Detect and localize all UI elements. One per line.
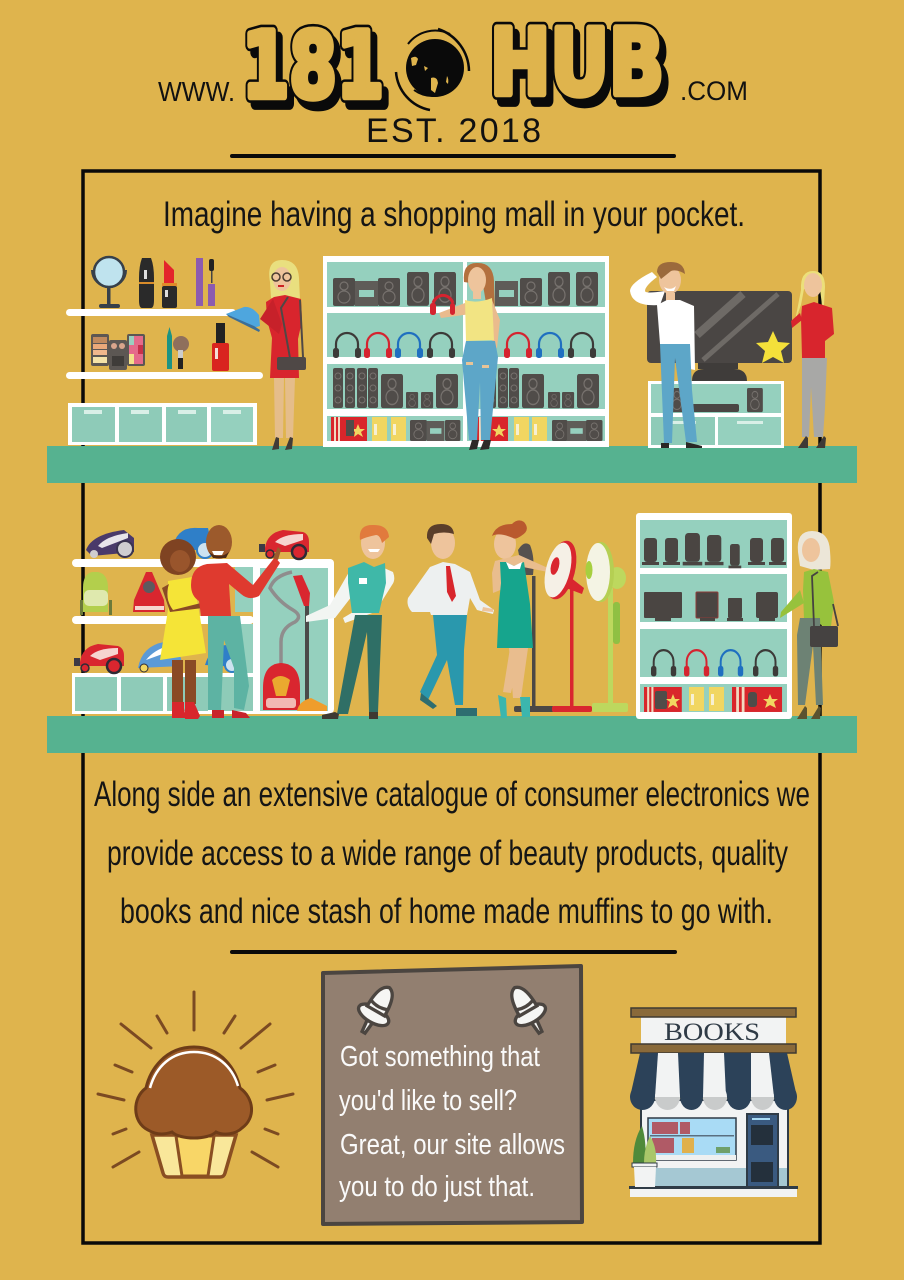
- shop base: [629, 1186, 798, 1197]
- logo: 181 wordmark: 181: [242, 14, 384, 119]
- icon: green pedestal fan: [586, 542, 628, 712]
- scene: lower store: [47, 513, 857, 753]
- beauty shelves: [66, 257, 263, 445]
- icon: left push pin: [349, 979, 404, 1041]
- icon: red pedestal fan: [540, 538, 592, 712]
- card text: you to do just that.: [339, 1171, 535, 1203]
- card text: [339, 1041, 565, 1203]
- header rule: [230, 154, 676, 158]
- headphones row: [333, 333, 596, 358]
- shelf boards: [66, 309, 263, 379]
- logo header: [158, 11, 748, 150]
- person: woman in teal dress: [492, 520, 548, 718]
- icon: vanity mirror: [92, 257, 126, 308]
- logo: 181 wordmark: 181: [247, 21, 389, 126]
- icon: red vacuum lower shelf: [74, 644, 124, 673]
- icon: makeup palettes: [91, 334, 145, 370]
- content frame: [83, 171, 820, 1243]
- icon: pencil and brush: [167, 327, 189, 369]
- floor: upper: [47, 446, 857, 483]
- scene: upper store: [47, 256, 857, 483]
- media cabinet: [648, 381, 784, 448]
- tvs row: [644, 592, 778, 621]
- tv screen: [647, 291, 792, 381]
- speakers: top row: [333, 272, 598, 306]
- icon: purple vacuum: [86, 530, 134, 558]
- television on media cabinet: [647, 291, 792, 448]
- speakers: third row: [333, 368, 599, 408]
- icon: black lipstick case: [139, 258, 154, 308]
- vacuum shelving unit: [72, 528, 334, 714]
- hifi shelving unit: [323, 256, 609, 447]
- roof bars: [631, 1008, 796, 1053]
- description paragraph: [94, 775, 810, 931]
- shelf frame: [323, 256, 609, 447]
- logo: established date: EST. 2018: [366, 112, 541, 150]
- icon: green upright vacuum: [80, 572, 112, 615]
- rays: [98, 992, 293, 1167]
- headphones row: [651, 650, 778, 676]
- shop sign: BOOKS: [664, 1019, 760, 1046]
- shop door: [747, 1114, 778, 1187]
- person: walking man in shirt and red tie: [408, 524, 494, 716]
- logo: www prefix: WWW.: [158, 76, 235, 107]
- person: woman in yellow dress: [160, 539, 206, 719]
- muffin cup: [152, 1135, 236, 1177]
- sell note card: [323, 966, 582, 1224]
- shop sign: [641, 1016, 786, 1046]
- drawer cabinet: [72, 673, 260, 714]
- person: man in white shirt scratching head: [630, 262, 702, 448]
- section rule: [230, 950, 677, 954]
- icon: red lipstick: [162, 260, 177, 308]
- person: older woman in green sweater with bag: [780, 531, 838, 719]
- card text: Great, our site allows: [340, 1129, 565, 1161]
- books row: [644, 687, 782, 712]
- person: salesman in teal vest: [306, 525, 394, 719]
- icon: blue vacuum: [172, 528, 213, 558]
- muffin top: [136, 1047, 252, 1138]
- card text: Got something that: [340, 1041, 540, 1073]
- icon: red vacuum held up: [259, 530, 309, 559]
- icon: blue vacuums lower shelf: [138, 642, 239, 672]
- headline: Imagine having a shopping mall in your pocket.: [163, 195, 745, 234]
- icon: book store: [629, 1008, 798, 1197]
- logo: HUB wordmark: HUB: [490, 11, 664, 116]
- icon: red upright vacuum: [133, 572, 165, 612]
- person: brunette shopper in yellow top holding headphones: [430, 263, 500, 450]
- icon: globe with orbit arcs: [396, 29, 469, 110]
- floor: lower: [47, 716, 857, 753]
- card text: you'd like to sell?: [339, 1085, 517, 1117]
- storefront wall: [641, 1100, 788, 1187]
- muffin highlight: [150, 1052, 238, 1088]
- potted plant: [632, 1126, 657, 1187]
- lower wall band: [642, 1168, 787, 1187]
- person: blonde shopper in red dress with glasses: [226, 260, 306, 450]
- shop window: [648, 1118, 736, 1160]
- drawer cabinet: [68, 403, 257, 445]
- icon: right push pin: [500, 979, 555, 1041]
- person: blonde woman in red sweater by tv: [791, 271, 834, 448]
- logo: HUB wordmark: HUB: [490, 11, 664, 116]
- icon: glowing muffin: [98, 992, 293, 1177]
- icon: mascara: [196, 258, 215, 306]
- logo: com suffix: .COM: [680, 76, 748, 106]
- shelf frame: [636, 513, 792, 719]
- icon: rating star: [756, 331, 790, 363]
- speakers row: [642, 533, 786, 568]
- icon: grey pedestal fan: [514, 543, 554, 712]
- books and stereo bottom row: [331, 417, 602, 441]
- shelf frame: [72, 559, 334, 714]
- striped awning: [630, 1053, 797, 1110]
- icon: canister vacuum with hose: [263, 572, 327, 711]
- card background: [323, 966, 582, 1224]
- electronics shelving unit: [636, 513, 792, 719]
- logo: 181 wordmark: 181: [242, 14, 384, 119]
- icon: nail polish: [212, 323, 229, 371]
- logo: HUB wordmark: HUB: [495, 18, 669, 123]
- person: man in red sweater: [191, 525, 281, 718]
